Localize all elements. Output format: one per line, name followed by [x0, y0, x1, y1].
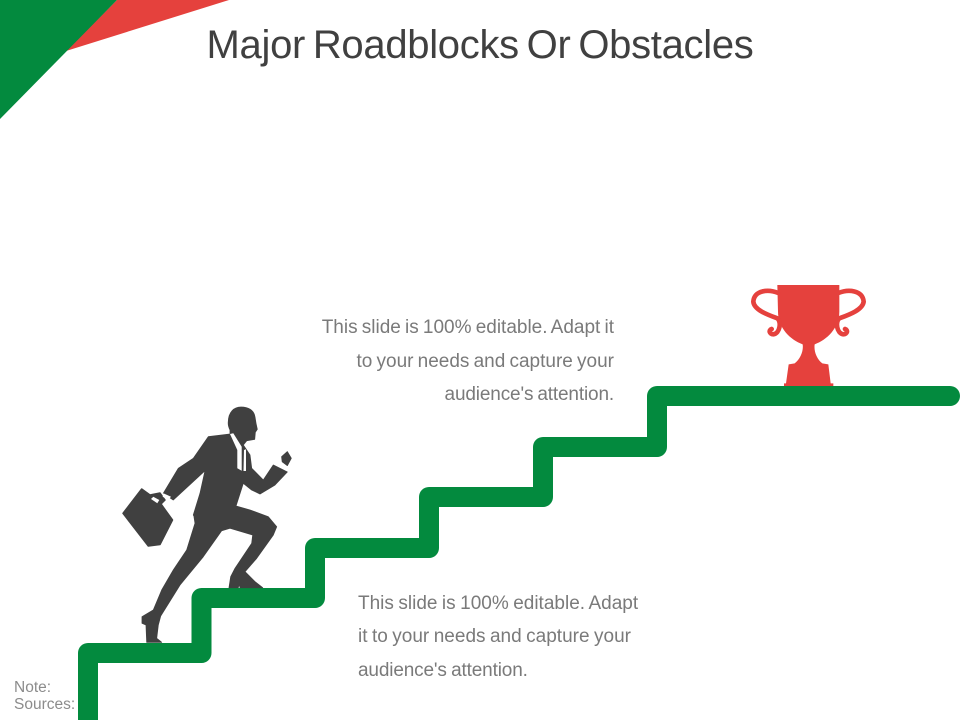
footnote	[14, 679, 75, 713]
text block: upper	[322, 317, 615, 405]
text block: lower: it to your needs and capture your	[358, 626, 632, 647]
text block: upper: to your needs and capture your	[356, 351, 615, 372]
icon: businessman running with briefcase	[123, 407, 291, 642]
text block: lower: This slide is 100% editable. Adapt	[358, 593, 639, 614]
corner decoration	[0, 0, 229, 119]
footnote: Note:	[14, 679, 51, 696]
text block: upper: This slide is 100% editable. Adapt it	[322, 317, 615, 338]
text block: upper: audience's attention.	[445, 384, 614, 405]
staircase	[88, 396, 950, 720]
icon: trophy	[753, 285, 864, 386]
text block: lower: audience's attention.	[358, 660, 528, 681]
text block: lower	[358, 593, 639, 681]
title: Major Roadblocks Or Obstacles	[207, 23, 753, 67]
footnote: Sources:	[14, 696, 75, 713]
